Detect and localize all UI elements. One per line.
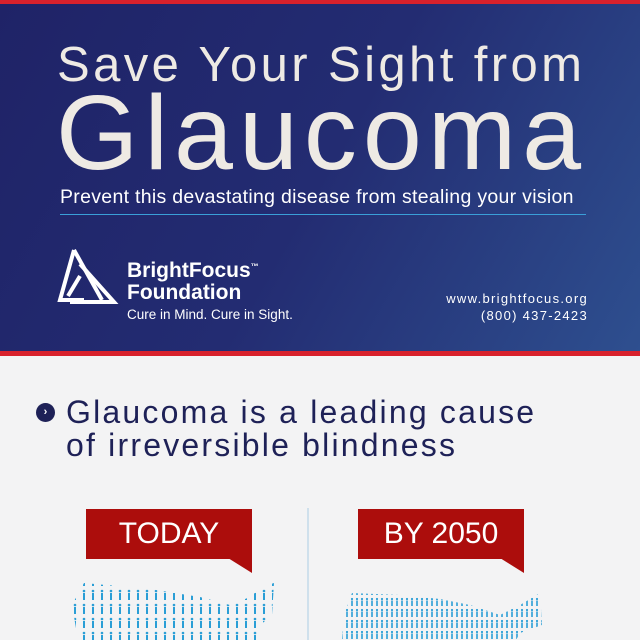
heading text: of irreversible blindness — [66, 427, 457, 463]
logo text — [127, 259, 259, 304]
logo text: BrightFocus™ — [127, 259, 259, 282]
header panel — [0, 0, 640, 356]
contact info: (800) 437-2423 — [481, 308, 588, 323]
subtitle: Prevent this devastating disease from stealing your vision — [60, 186, 574, 208]
map: today — [72, 583, 274, 640]
label: by 2050: BY 2050 — [384, 517, 498, 550]
heading text: Glaucoma is a leading cause — [66, 394, 536, 430]
label: by 2050 — [358, 509, 524, 573]
title line 1: Save Your Sight from — [57, 38, 585, 92]
title line 2: Glaucoma — [56, 74, 587, 192]
chart: people maps — [74, 583, 542, 640]
contact info: www.brightfocus.org — [446, 291, 588, 306]
icon: bullet: › — [44, 406, 47, 418]
contact info — [446, 291, 588, 323]
tagline: Cure in Mind. Cure in Sight. — [127, 307, 293, 322]
icon: bullet — [36, 403, 55, 422]
label: today — [86, 509, 252, 573]
logo text: Foundation — [127, 281, 241, 304]
icon: logo triangles — [57, 249, 118, 304]
heading text — [66, 394, 536, 463]
section heading — [36, 394, 536, 463]
label: today: TODAY — [119, 517, 219, 550]
map: 2050 — [342, 593, 542, 640]
